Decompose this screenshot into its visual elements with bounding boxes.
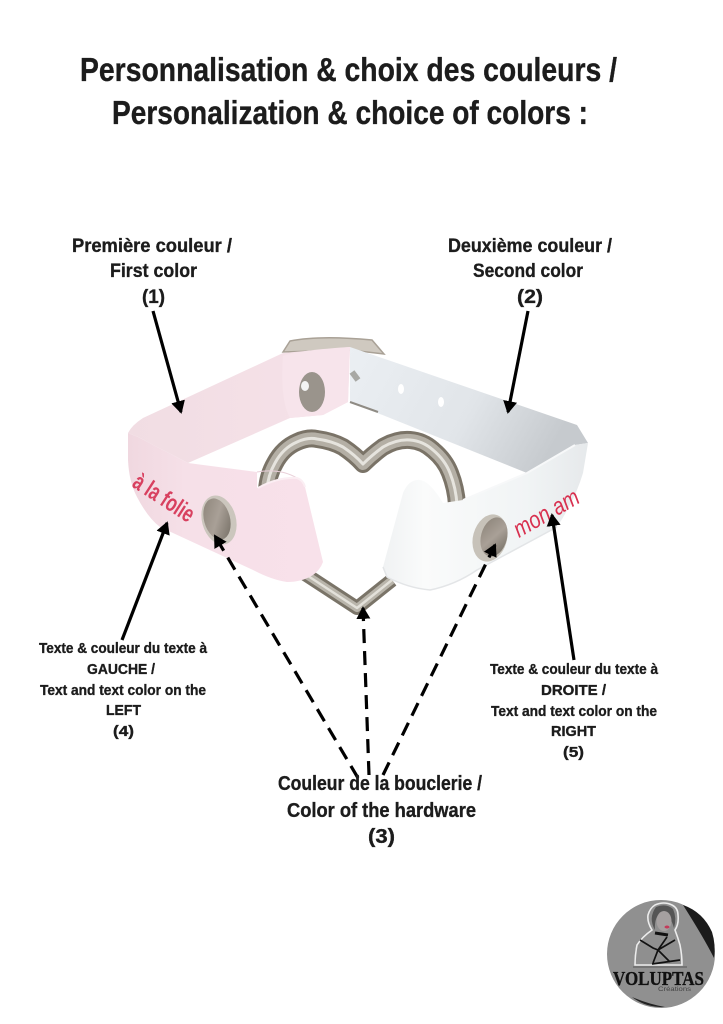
label: hardware color (3): Color of the hardware [287,800,476,822]
engraved text right: mon am [508,484,584,543]
arrow to first color [153,311,181,412]
label: right text (5): (5) [563,745,584,761]
title: Personalization & choice of colors : [112,94,588,131]
label: right text (5) [490,662,659,761]
label: hardware color (3): Couleur de la bouclerie / [278,773,482,795]
dashed arrow to left snap [215,536,358,778]
engraved text left: à la folie [128,468,199,528]
logo disc [607,900,715,1008]
label: right text (5): DROITE / [541,683,606,699]
pink front strap [128,433,323,582]
label: right text (5): RIGHT [551,724,596,740]
grey inner strap [350,347,588,473]
label: second color (2): Deuxième couleur / [448,235,613,257]
label: left text (4): GAUCHE / [87,662,155,678]
label: first color (1): (1) [142,286,165,308]
pink inner strap [128,347,350,463]
arrow to second color [508,311,528,412]
label: second color (2): Second color [473,260,583,282]
label: left text (4): Text and text color on the [40,683,206,699]
white front strap [383,443,588,590]
label: left text (4) [39,641,208,740]
right snap [467,510,513,566]
page curl bottom left [632,997,665,1007]
label: right text (5): Texte & couleur du texte à [490,662,659,678]
label: left text (4): (4) [113,724,134,740]
label: hardware color (3) [278,773,482,848]
label: left text (4): Texte & couleur du texte à [39,641,208,657]
logo: Voluptas [607,900,715,1008]
label: right text (5): Text and text color on the [491,704,657,720]
label: left text (4): LEFT [106,703,141,719]
left snap [196,491,242,549]
buckle at the back of the collar [283,338,384,354]
title [80,51,617,131]
logo subtitle: Créations [658,987,691,993]
label: second color (2) [448,235,613,308]
page curl top right [683,905,715,958]
woman figure [633,903,687,967]
arrow to right text [552,515,574,660]
title: Personnalisation & choix des couleurs / [80,51,617,88]
heart ring [267,438,457,608]
pink tab with rear snap [282,347,350,418]
dashed arrow to heart ring [363,608,369,775]
label: first color (1) [72,235,233,308]
collar photo [128,338,588,608]
arrow to left text [122,523,167,640]
label: hardware color (3): (3) [368,826,395,848]
label: first color (1): Première couleur / [72,235,233,257]
label: second color (2): (2) [517,286,543,308]
label: first color (1): First color [110,260,197,282]
dashed arrow to right snap [383,545,495,775]
logo wordmark: VOLUPTAS [613,968,704,990]
